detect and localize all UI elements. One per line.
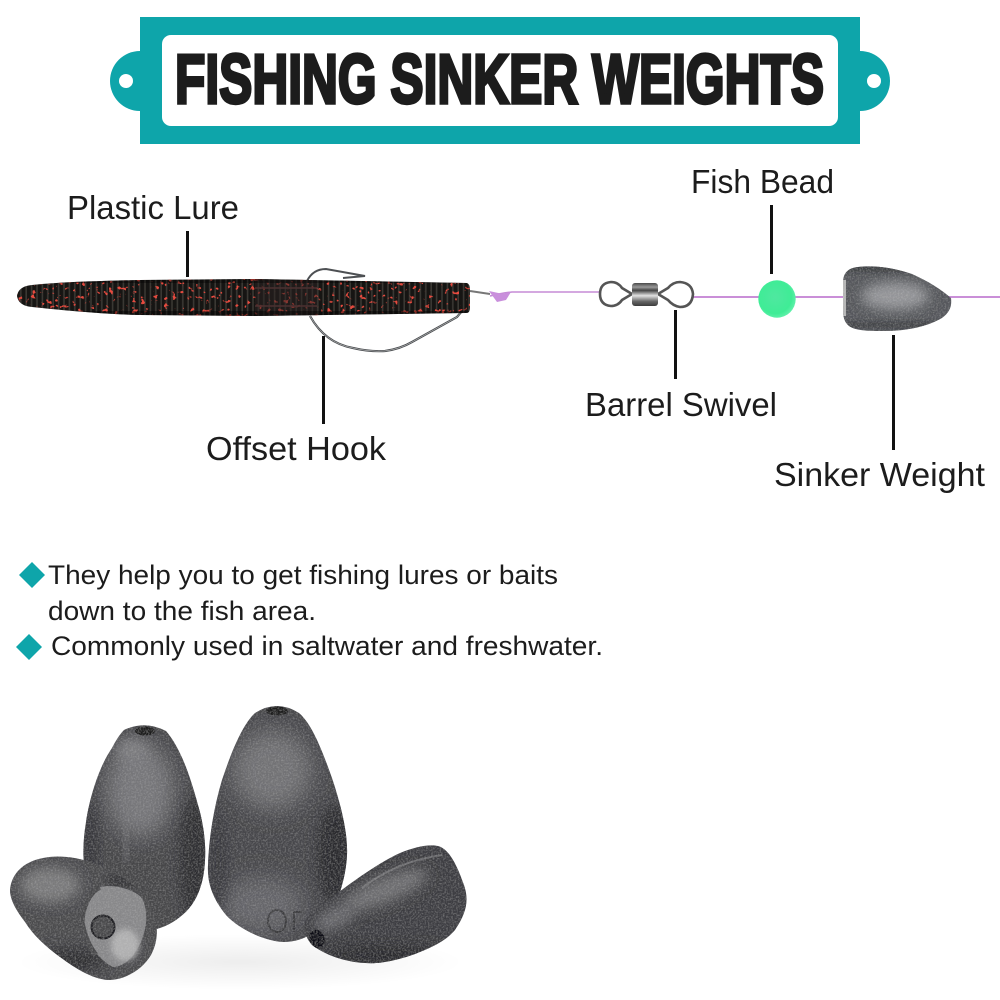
pointer: fish bead (770, 205, 773, 274)
label: barrel swivel (585, 310, 777, 423)
fishing line (470, 291, 1000, 302)
plastic lure (15, 278, 471, 318)
label: sinker weight (774, 335, 985, 493)
back right sinker (208, 706, 348, 942)
offset hook (307, 269, 462, 351)
banner tag: teal plate (110, 17, 890, 144)
photo of four sinkers (5, 700, 472, 990)
label: offset hook: Offset Hook (206, 430, 387, 467)
ground shadows (15, 934, 465, 990)
back left sinker (83, 725, 206, 930)
label: fish bead (691, 163, 834, 274)
pointer: sinker weight (892, 335, 895, 450)
label: sinker weight: Sinker Weight (774, 456, 985, 493)
front right sinker (304, 845, 467, 964)
bullet text 2: Commonly used in saltwater and freshwater. (51, 631, 603, 661)
label: barrel swivel: Barrel Swivel (585, 386, 777, 423)
sinker weight on line (843, 266, 952, 331)
label: fish bead: Fish Bead (691, 163, 834, 200)
barrel swivel (600, 282, 693, 307)
hollow base face (82, 886, 146, 967)
bullet text block (16, 560, 603, 661)
pointer: barrel swivel (674, 310, 677, 379)
bullet text 1: They help you to get fishing lures or baits (48, 560, 558, 590)
bullet text 1 (48, 560, 558, 626)
label: plastic lure (67, 189, 239, 277)
fish bead (758, 280, 796, 318)
front left sinker (10, 856, 157, 980)
title banner (110, 17, 890, 144)
pointer: offset hook (322, 336, 325, 424)
bullet icon 2 (16, 634, 42, 660)
label: plastic lure: Plastic Lure (67, 189, 239, 226)
bullet icon 1 (19, 562, 45, 588)
pointer: plastic lure (186, 231, 189, 277)
bullet text 1: down to the fish area. (48, 596, 316, 626)
label: offset hook (206, 336, 387, 467)
